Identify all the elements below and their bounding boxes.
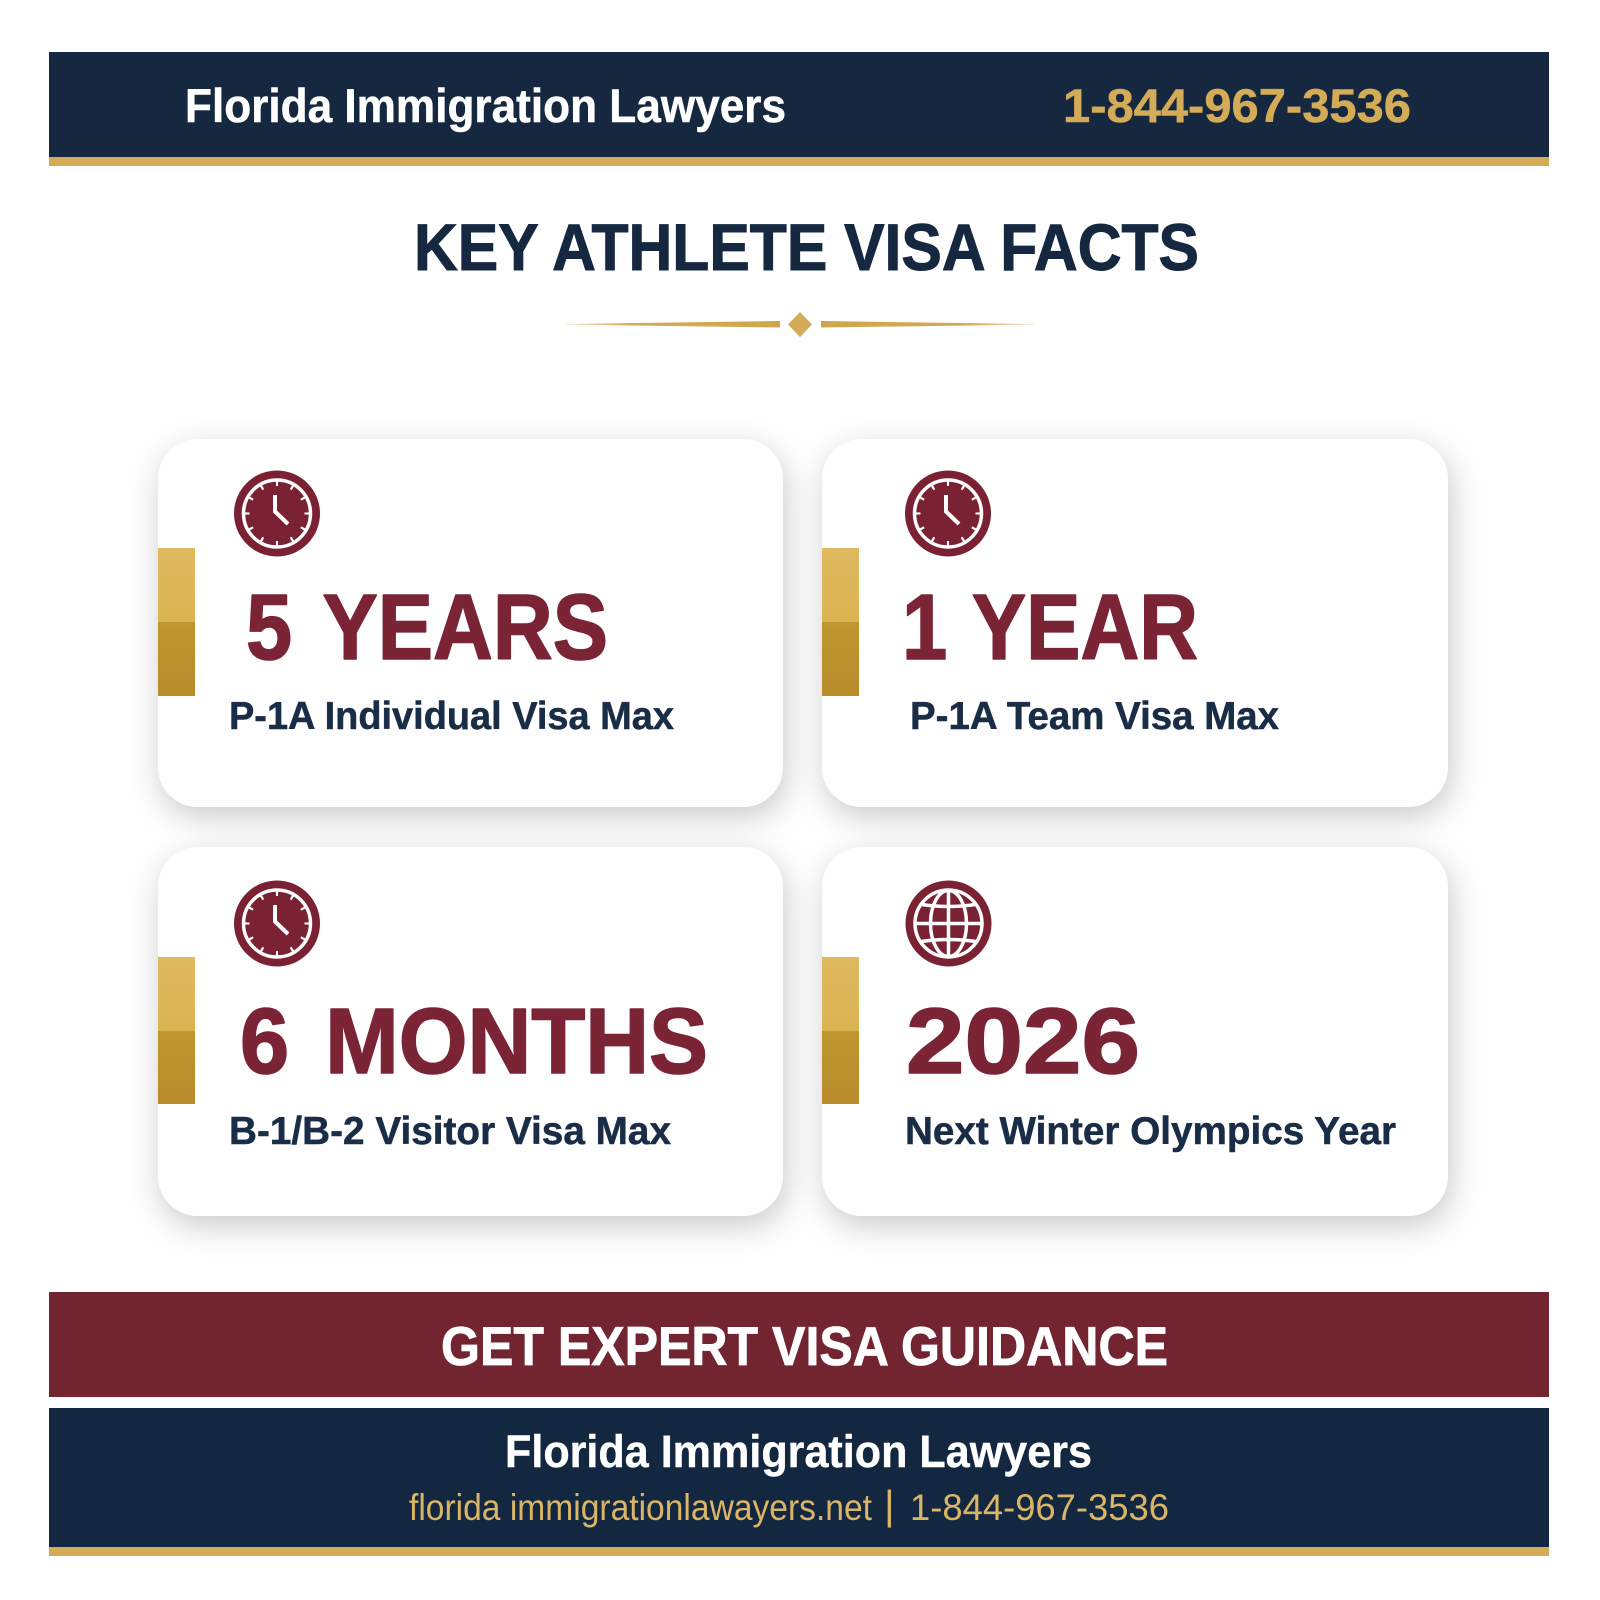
gold accent bar [158, 548, 195, 696]
label: P-1A individual: P-1A Individual Visa Max [229, 695, 674, 738]
gold accent bar [822, 957, 859, 1104]
icon: clock [234, 470, 320, 556]
gold accent bar [822, 548, 859, 696]
panel: 5 years [158, 439, 783, 807]
icon: clock [234, 880, 320, 966]
label: P-1A team: P-1A Team Visa Max [910, 695, 1279, 738]
header firm name: Florida Immigration Lawyers [185, 79, 786, 132]
footer contact line: 1-844-967-3536 [910, 1487, 1169, 1528]
top header bar [49, 52, 1549, 166]
banner heading: GET EXPERT VISA GUIDANCE [441, 1315, 1168, 1377]
gold accent bar [158, 957, 195, 1104]
footer contact line: | [884, 1482, 895, 1528]
stat: 6 months: 6 MONTHS [240, 989, 708, 1093]
stat: 1 year: 1 YEAR [902, 575, 1198, 679]
main title: KEY ATHLETE VISA FACTS [414, 210, 1199, 284]
panel: 6 months [158, 847, 783, 1216]
call to action banner [49, 1292, 1549, 1397]
label: next winter olympics: Next Winter Olympics Year [905, 1110, 1396, 1153]
footer bar [49, 1408, 1549, 1556]
icon: clock [905, 470, 991, 556]
title divider with diamond [566, 312, 1034, 337]
icon: globe [906, 880, 992, 966]
footer contact line: florida immigrationlawayers.net [409, 1487, 873, 1528]
footer contact line [409, 1482, 1169, 1528]
stat: 5 years: 5 YEARS [246, 575, 608, 679]
panel: 1 year [822, 439, 1448, 807]
footer firm name: Florida Immigration Lawyers [505, 1426, 1092, 1477]
panel: 2026 [822, 847, 1448, 1216]
stat: 2026: 2026 [906, 989, 1140, 1093]
label: B-1/B-2 visitor: B-1/B-2 Visitor Visa Max [229, 1110, 671, 1153]
header phone number: 1-844-967-3536 [1063, 79, 1411, 132]
